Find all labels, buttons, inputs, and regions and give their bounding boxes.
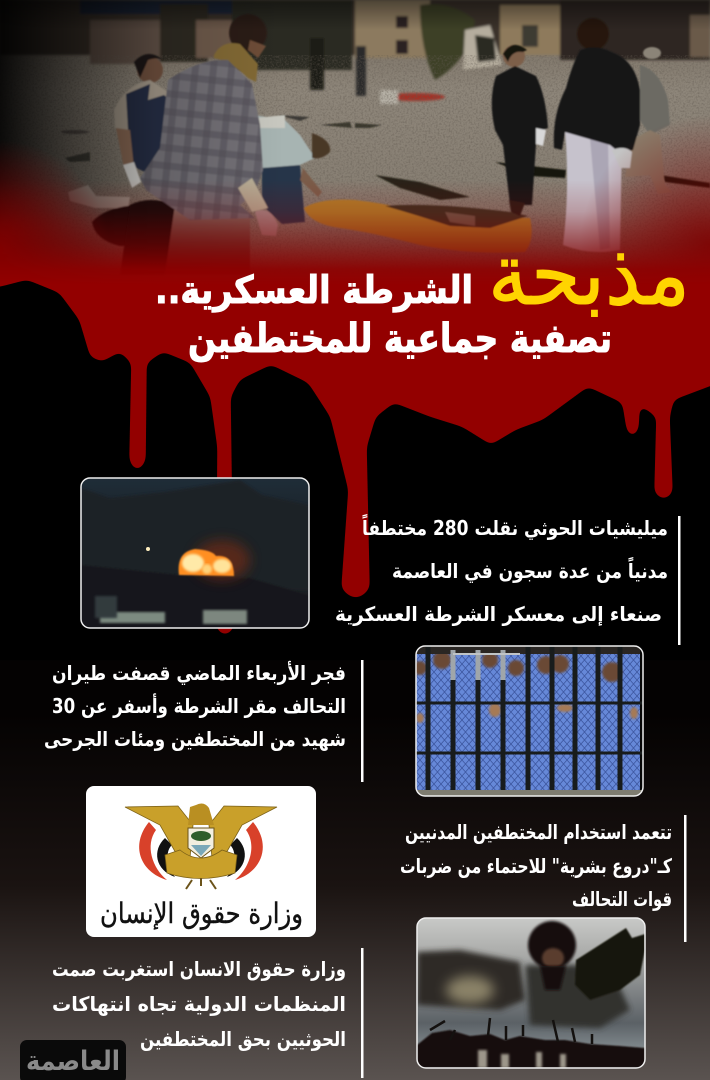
text line: مدنياً من عدة سجون في العاصمة <box>392 557 668 584</box>
text line: فجر الأربعاء الماضي قصفت طيران <box>52 660 346 686</box>
black area with blood drip contour <box>0 280 710 660</box>
text line: شهيد من المختطفين ومئات الجرحى <box>44 727 346 751</box>
vertical rule <box>678 516 680 645</box>
vertical rule <box>684 815 686 942</box>
text block 2 <box>44 660 364 782</box>
text line: المنظمات الدولية تجاه انتهاكات <box>52 992 346 1016</box>
left red tint <box>0 140 130 300</box>
man in dark vest <box>114 54 170 188</box>
orange body bag <box>304 200 532 253</box>
text line: وزارة حقوق الانسان استغربت صمت <box>52 957 346 981</box>
right red tint <box>520 100 710 300</box>
gravel texture <box>0 55 710 275</box>
left dark vignette <box>0 0 710 300</box>
title line 2: تصفية جماعية للمختطفين <box>188 316 612 362</box>
top shade <box>0 0 710 30</box>
photo: armed fighters <box>417 918 645 1068</box>
vertical rule <box>361 660 364 782</box>
logo caption: وزارة حقوق الإنسان <box>100 897 303 930</box>
text line: صنعاء إلى معسكر الشرطة العسكرية <box>335 602 662 626</box>
text block 1 <box>335 514 680 645</box>
text block 3 <box>400 815 686 942</box>
man at far right <box>625 47 672 194</box>
vertical rule <box>361 948 364 1078</box>
man in plaid jacket <box>120 14 278 275</box>
man in black jacket and white robe <box>554 18 640 252</box>
photo: prisoners behind bars <box>413 646 643 796</box>
crouching man in light shirt <box>254 115 330 224</box>
photo: night explosion <box>81 478 309 628</box>
shadows and debris <box>61 115 710 246</box>
buildings and trees <box>0 0 710 104</box>
man in centre <box>492 45 548 216</box>
title line 1: الشرطة العسكرية.. <box>155 268 473 312</box>
top photo: aftermath scene <box>0 0 710 300</box>
title <box>155 225 690 362</box>
ministry logo card <box>86 786 316 937</box>
title word: massacre: مذبحة <box>488 225 690 325</box>
source logo badge: العاصمة <box>26 1046 120 1077</box>
text line: ميليشيات الحوثي نقلت 280 مختطفاً <box>362 514 668 541</box>
text line: التحالف مقر الشرطة وأسفر عن 30 <box>52 692 346 718</box>
icon: Yemen national emblem <box>125 804 277 889</box>
text block 4 <box>52 948 364 1078</box>
blood band <box>0 180 710 655</box>
text line: الحوثيين بحق المختطفين <box>140 1027 346 1051</box>
text line: قوات التحالف <box>572 887 672 911</box>
